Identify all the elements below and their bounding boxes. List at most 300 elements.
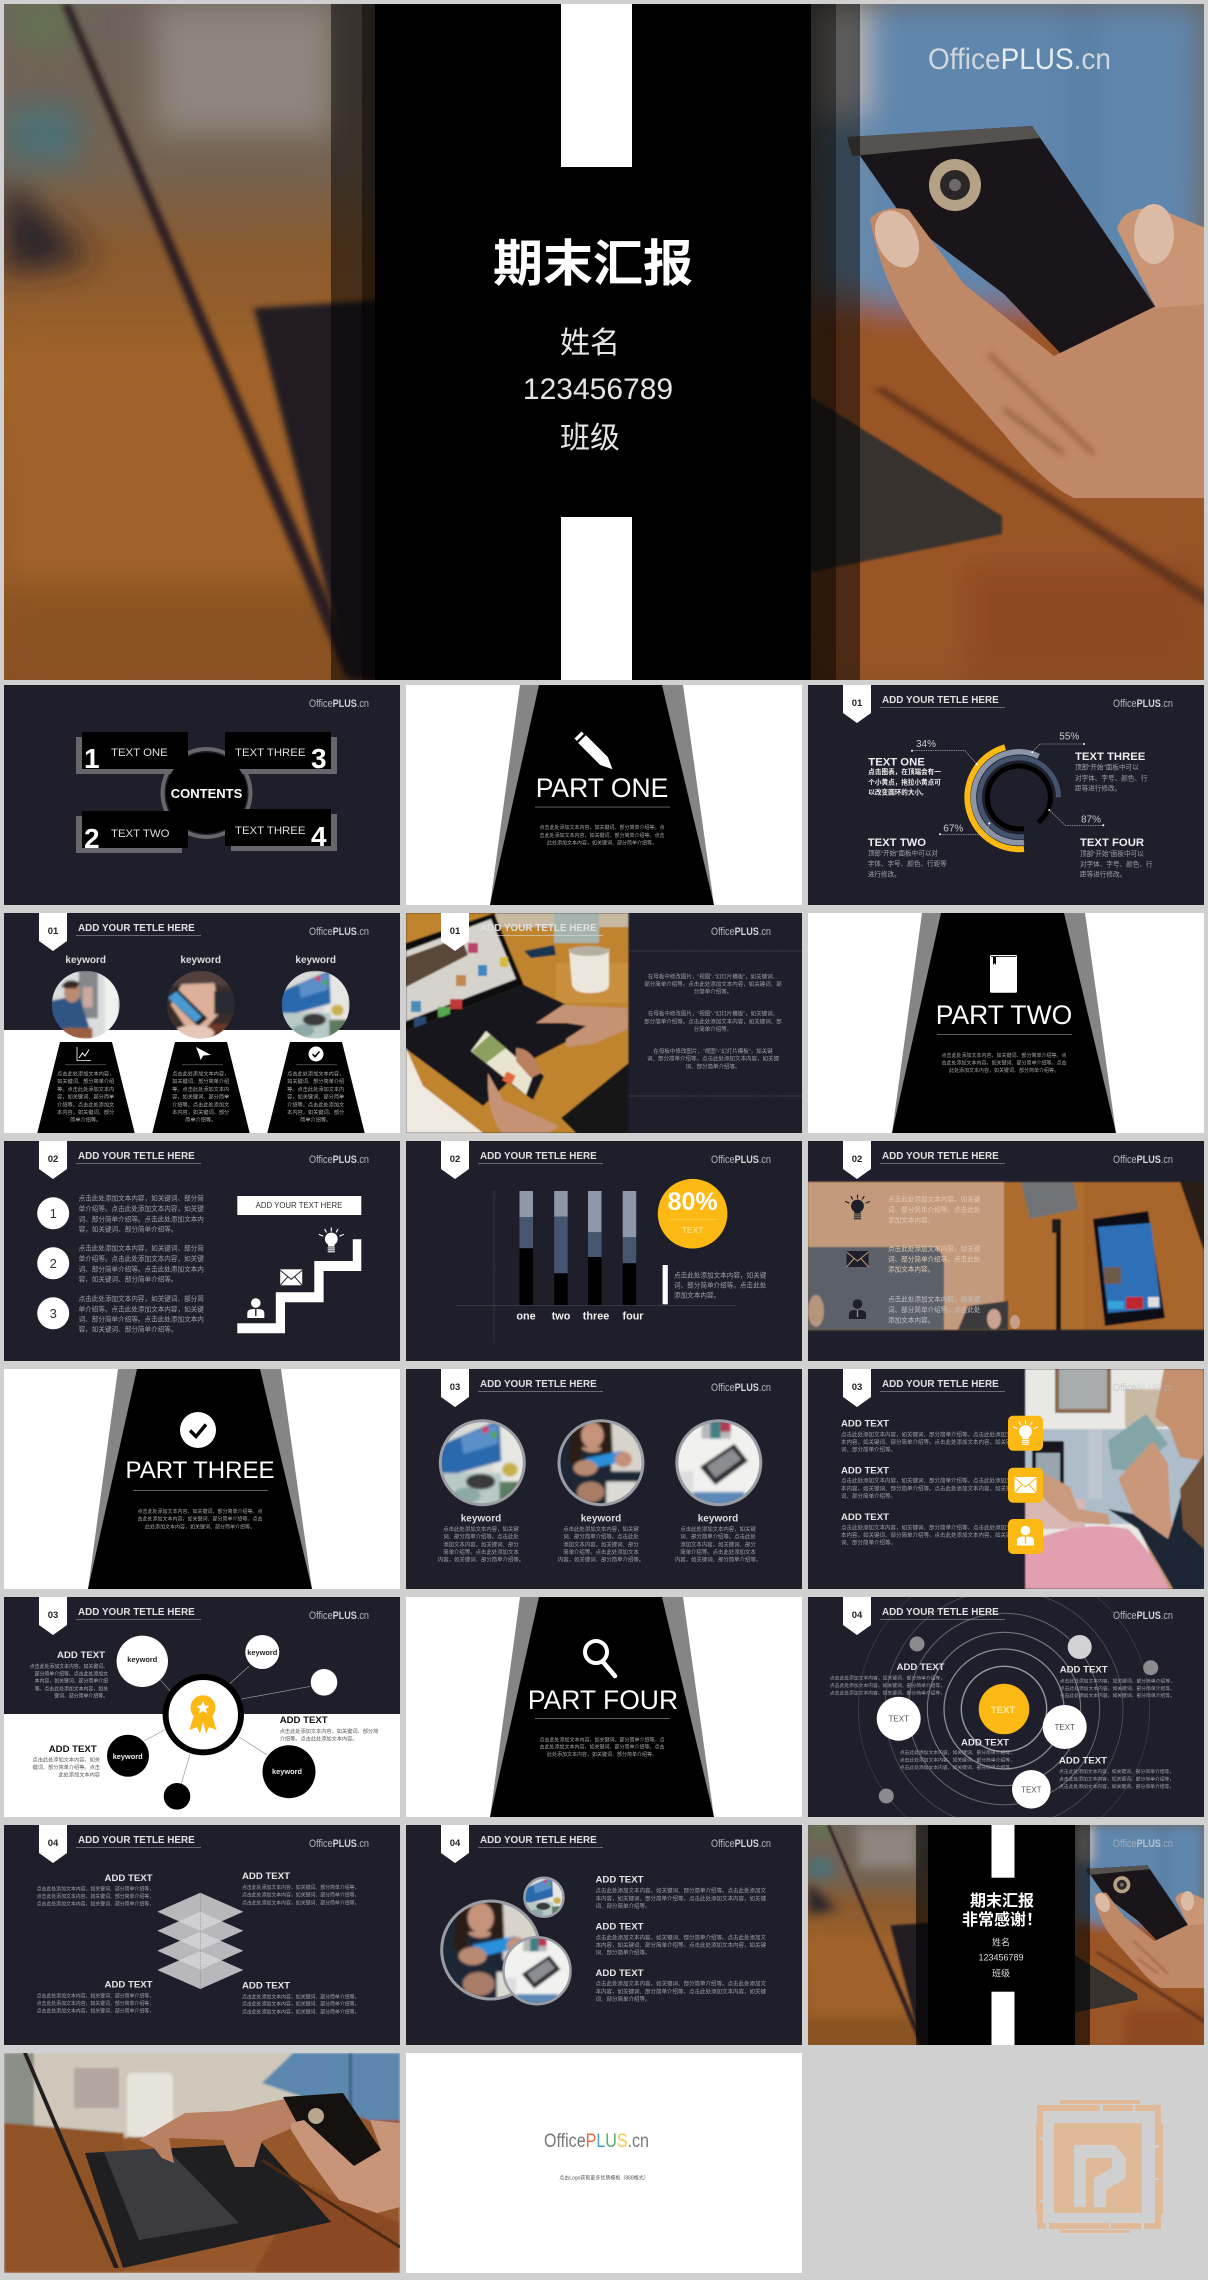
bubble: keyboard <box>502 1936 572 2005</box>
icon: light bulb <box>846 1195 870 1219</box>
item numbers: 4 <box>311 821 327 852</box>
bar labels: two <box>552 1310 571 1322</box>
text two: 字体、字号、颜色、行距等 <box>868 859 947 868</box>
item 2: 词、部分简单介绍等。 <box>596 1948 651 1956</box>
black trapezoids <box>37 1042 365 1133</box>
item labels: TEXT THREE <box>235 747 306 759</box>
bar three <box>588 1191 602 1305</box>
text block 2: 在母板中修改图片，“视图”-“幻灯片模板”，如关键词、 <box>648 1010 778 1018</box>
cover subtitle block <box>523 327 673 455</box>
section tab <box>39 913 67 951</box>
background <box>808 1597 1204 1817</box>
description: 击此处添加文本内容，如关键词、部分简单介绍等。点击 <box>539 1744 665 1751</box>
text bottom-left: 点击此处添加文本内容，如关键词、部分简单介绍等， <box>37 2008 154 2015</box>
white node small <box>311 1669 337 1696</box>
text bottom-right: ADD TEXT <box>242 1981 290 1992</box>
text block bottom-right: 点击此处添加文本内容，如关键词、部分简单介绍等， <box>1059 1783 1174 1790</box>
text block 3: 词、部分简单介绍等。点击此处 <box>888 1305 981 1314</box>
section number: 04 <box>450 1838 461 1849</box>
text block centre <box>900 1737 1015 1771</box>
yellow icon tile 1 <box>1008 1416 1043 1451</box>
item 3: 本内容，如关键词、部分简单介绍等。点击此处添加文本内容，如关键 <box>841 1531 1012 1539</box>
step 3 text: 词、部分简单介绍等。点击此处添加文本内 <box>79 1314 204 1323</box>
slide title: ADD YOUR TETLE HERE <box>480 1835 597 1846</box>
text block 2: 词、部分简单介绍等。点击此处 <box>888 1254 981 1263</box>
background <box>406 1597 802 1817</box>
text block 1: 添加文本内容。 <box>888 1215 934 1224</box>
step 1 text: 词、部分简单介绍等。点击此处添加文本内 <box>79 1214 204 1223</box>
text block top-right: 点击此处添加文本内容，如关键词、部分简单介绍等， <box>1060 1685 1175 1692</box>
white planets <box>877 1697 1087 1809</box>
column 1 text: 介绍等。点击此处添加文 <box>57 1100 115 1108</box>
section tab <box>843 685 871 723</box>
icon: check badge <box>308 1046 324 1062</box>
text four: 顶部“开始”面板中可以 <box>1080 849 1144 858</box>
top-left text: 本内容，如关键词、部分简单介绍 <box>35 1678 108 1685</box>
item 1: 词、部分简单介绍等。 <box>841 1446 896 1454</box>
phone <box>283 2093 381 2166</box>
background <box>406 685 802 905</box>
text bottom-right: 点击此处添加文本内容，如关键词、部分简单介绍等， <box>242 2008 359 2015</box>
title underline <box>880 1390 1005 1393</box>
text block 1: 分简单介绍等。 <box>694 988 732 996</box>
text block 3: 词、部分简单介绍等。点击此处添加文本内容，如关键 <box>647 1055 779 1063</box>
bar one <box>520 1191 533 1305</box>
section tab <box>39 1597 67 1635</box>
heading: PART ONE <box>536 773 668 803</box>
section number: 03 <box>450 1382 460 1393</box>
centre ring <box>162 749 250 837</box>
text block top-right <box>1060 1664 1175 1699</box>
step 3 text: 点击此处添加文本内容，如关键词、部分简 <box>79 1294 204 1303</box>
slide: woman photo with icons <box>808 1369 1204 1589</box>
section tab <box>441 1369 469 1407</box>
text block 3: 添加文本内容。 <box>888 1315 934 1324</box>
title underline <box>76 1846 201 1849</box>
slide title: ADD YOUR TETLE HERE <box>78 1607 195 1618</box>
keyword labels: keyword <box>461 1513 501 1524</box>
central ring <box>166 1677 241 1752</box>
leader lines <box>912 744 1103 834</box>
text four: 对字体、字号、颜色、行 <box>1080 859 1153 868</box>
column 3 text: 点击此处添加文本内容，如关键 <box>680 1525 756 1533</box>
slide: part three <box>4 1369 400 1589</box>
column 3 text: 内容，如关键词、部分简单介绍等。 <box>675 1556 761 1564</box>
stat value: 80% <box>668 1188 718 1216</box>
slide: contents <box>4 685 400 905</box>
gray trapezoid <box>490 1597 714 1817</box>
item 3: ADD TEXT <box>841 1512 889 1523</box>
icon: paper plane <box>196 1047 211 1060</box>
description: 点击此处添加文本内容，如关键词、部分简单介绍等。点 <box>539 824 665 831</box>
item numbers: 2 <box>84 823 100 854</box>
column 1 text: 如关键词、部分简单介绍 <box>57 1077 114 1085</box>
icon: magnifier <box>585 1641 615 1676</box>
item 2 <box>841 1465 1012 1500</box>
bar labels: three <box>583 1310 609 1322</box>
column 1 text: 容，如关键词、部分简单 <box>57 1093 114 1101</box>
item 1 <box>596 1875 767 1910</box>
item 1: 点击此处添加文本内容，如关键词、部分简单介绍等。点击此处添加文 <box>841 1430 1012 1438</box>
dark background <box>4 1597 400 1714</box>
step 1 text: 单介绍等。点击此处添加文本内容，如关键 <box>79 1204 204 1213</box>
lower-left text <box>33 1744 100 1779</box>
section number: 01 <box>852 698 863 709</box>
central yellow planet <box>979 1684 1029 1734</box>
cover subtitle block: 123456789 <box>523 373 673 406</box>
text two: 顶部“开始”面板中可以对 <box>868 849 938 858</box>
photo background <box>4 2053 400 2273</box>
photo circle: tablet desk <box>439 1420 525 1506</box>
gray dots <box>879 1635 1158 1804</box>
title underline <box>880 707 1005 708</box>
numbers: 2 <box>50 1256 57 1271</box>
background <box>406 913 802 1133</box>
keyword labels: keyword <box>581 1513 621 1524</box>
right text: ADD TEXT <box>280 1715 328 1726</box>
text block centre: 点击此处添加文本内容，如关键词、部分简单介绍等， <box>900 1764 1015 1771</box>
column 2 text: 词、部分简单介绍等。点击此处 <box>563 1533 639 1541</box>
column 3 text: 本内容，如关键词、部分 <box>287 1108 344 1116</box>
column 3 text: 简单介绍等。点击此处添加文本 <box>680 1548 756 1556</box>
description: 此处添加文本内容，如关键词、部分简单介绍等。 <box>949 1067 1059 1074</box>
bubble: tablet desk <box>524 1877 564 1918</box>
table inlay <box>262 2160 400 2247</box>
logo: OfficePLUS.cn <box>1113 1610 1173 1622</box>
item 1: 词、部分简单介绍等。 <box>596 1902 651 1910</box>
text top-right: ADD TEXT <box>242 1871 290 1882</box>
logo: OfficePLUS.cn <box>711 926 771 938</box>
text two <box>868 837 947 878</box>
item 3: 点击此处添加文本内容，如关键词、部分简单介绍等。点击此处添加文 <box>841 1523 1012 1531</box>
node labels: keyword <box>113 1752 143 1761</box>
title underline <box>478 934 603 937</box>
item numbers: 1 <box>84 743 100 774</box>
black node left <box>107 1735 149 1777</box>
white bottom background <box>4 1030 400 1133</box>
translucent band <box>916 1825 1090 2045</box>
step 2 text: 单介绍等。点击此处添加文本内容，如关键 <box>79 1254 204 1263</box>
text top-left: 点击此处添加文本内容，如关键词、部分简单介绍等， <box>37 1901 154 1908</box>
title underline <box>76 1162 201 1165</box>
title: 期末汇报 <box>970 1891 1034 1910</box>
lower-left text: ADD TEXT <box>49 1744 97 1755</box>
step 3 text: 容，如关键词、部分简单介绍等。 <box>79 1325 178 1334</box>
text bottom-left: 点击此处添加文本内容，如关键词、部分简单介绍等， <box>37 2000 154 2007</box>
slide title: ADD YOUR TETLE HERE <box>882 1151 999 1162</box>
text bottom-left: ADD TEXT <box>105 1980 153 1991</box>
description: 击此处添加文本内容，如关键词、部分简单介绍等。点击 <box>941 1060 1067 1067</box>
item labels: TEXT THREE <box>235 825 306 837</box>
item 2: ADD TEXT <box>596 1921 644 1932</box>
item 1: ADD TEXT <box>596 1875 644 1886</box>
colored logo: OfficePLUS.cn <box>544 2131 649 2152</box>
slide: photo bubbles <box>406 1825 802 2045</box>
numbers: 1 <box>50 1206 57 1221</box>
text top-left: ADD TEXT <box>105 1873 153 1884</box>
slide title: ADD YOUR TETLE HERE <box>882 1607 999 1618</box>
slide title: ADD YOUR TETLE HERE <box>480 923 597 934</box>
column 1 text: 简单介绍等。 <box>70 1116 101 1124</box>
logo: OfficePLUS.cn <box>309 698 369 710</box>
logo: OfficePLUS.cn <box>1113 1382 1173 1394</box>
column 2 text: 点击此处添加文本内容， <box>172 1070 229 1078</box>
divider <box>535 1717 670 1720</box>
text block 1: 在母板中修改图片，“视图”-“幻灯片模板”，如关键词、 <box>648 972 778 980</box>
slide: cover <box>4 4 1208 680</box>
step 2 text: 点击此处添加文本内容，如关键词、部分简 <box>79 1244 204 1253</box>
laptop <box>23 2053 331 2268</box>
icon: line chart <box>77 1047 91 1060</box>
column 1 text: 点击此处添加文本内容， <box>57 1070 114 1078</box>
slide: three photo circles <box>406 1369 802 1589</box>
text block 3: 词、部分简单介绍等。 <box>685 1062 741 1070</box>
text four <box>1080 837 1153 878</box>
section number: 02 <box>48 1154 58 1165</box>
text top-right: 点击此处添加文本内容，如关键词、部分简单介绍等， <box>242 1892 359 1899</box>
item 2 <box>596 1921 767 1956</box>
translucent inner band <box>362 4 836 680</box>
divider <box>535 806 670 808</box>
column 2 text: 本内容，如关键词、部分 <box>172 1108 229 1116</box>
column 2 text: 内容，如关键词、部分简单介绍等。 <box>558 1556 644 1564</box>
right text: 介绍等。点击此处添加文本内容。 <box>280 1735 358 1743</box>
label box <box>237 1196 361 1215</box>
black node right <box>262 1745 316 1798</box>
text block top-left: 点击此处添加文本内容，如关键词、部分简单介绍等， <box>830 1682 945 1689</box>
logo: OfficePLUS.cn <box>309 1838 369 1850</box>
background <box>808 1369 1204 1589</box>
text block top-right: 点击此处添加文本内容，如关键词、部分简单介绍等， <box>1060 1678 1175 1684</box>
column 1 text: 添加文本内容，如关键词、部分 <box>443 1540 519 1548</box>
text top-right: 点击此处添加文本内容，如关键词、部分简单介绍等， <box>242 1899 359 1906</box>
black trapezoid <box>490 685 714 905</box>
text three: 距等进行修改。 <box>1075 783 1121 792</box>
percentages: 55% <box>1059 731 1079 742</box>
percentages: 34% <box>916 739 936 750</box>
slide title: ADD YOUR TETLE HERE <box>882 1379 999 1390</box>
section tab <box>843 1597 871 1635</box>
item numbers: 3 <box>311 743 327 774</box>
text four: 距等进行修改。 <box>1080 869 1126 878</box>
text top-right: 点击此处添加文本内容，如关键词、部分简单介绍等， <box>242 1884 359 1891</box>
black column <box>928 1825 1075 2045</box>
top-left text: ADD TEXT <box>57 1650 105 1661</box>
text block 3: 点击此处添加文本内容，如关键 <box>888 1295 981 1304</box>
item 3 <box>596 1968 767 2003</box>
column 3 text: 简单介绍等。 <box>300 1116 331 1124</box>
text block 1: 部分简单介绍等。点击此处添加文本内容，如关键词、部 <box>644 980 782 988</box>
column 3 text: 词、部分简单介绍等。点击此处 <box>680 1533 756 1541</box>
description: 此处添加文本内容，如关键词、部分简单介绍等。 <box>547 840 657 846</box>
text block bottom-right: 点击此处添加文本内容，如关键词、部分简单介绍等， <box>1059 1768 1174 1775</box>
title underline <box>478 1846 603 1849</box>
logo: OfficePLUS.cn <box>1113 1838 1173 1850</box>
text two: TEXT TWO <box>868 837 926 849</box>
black node bottom <box>164 1783 190 1810</box>
text block 2: 部分简单介绍等。点击此处添加文本内容，如关键词、部 <box>644 1017 782 1025</box>
text block top-left <box>830 1662 945 1697</box>
column 3 text: 等。点击此处添加文本内 <box>287 1085 344 1093</box>
icon: person <box>1017 1526 1034 1546</box>
right text <box>280 1715 378 1743</box>
background <box>4 685 400 905</box>
label text: ADD YOUR TEXT HERE <box>256 1201 342 1210</box>
numbers <box>50 1206 57 1321</box>
icon: envelope <box>846 1251 868 1267</box>
caption: 点击Logo获取更多优质模板（888格式） <box>559 2174 649 2182</box>
background <box>808 1141 1204 1361</box>
white bar accent <box>663 1265 668 1304</box>
planet labels: TEXT <box>1021 1786 1042 1794</box>
title underline <box>478 1390 603 1393</box>
bar labels <box>516 1310 644 1322</box>
cover subtitle block: 班级 <box>560 422 620 455</box>
slide: part four <box>406 1597 802 1817</box>
slide: stacked diamonds <box>4 1825 400 2045</box>
divider <box>937 1033 1072 1036</box>
icon: book <box>990 955 1017 993</box>
side text: 点击此处添加文本内容，如关键 <box>674 1270 767 1279</box>
icon: envelope <box>280 1269 302 1285</box>
icon: award badge <box>190 1695 216 1734</box>
text one <box>868 756 941 796</box>
slide: keywords with trapezoids <box>4 913 400 1133</box>
slide: closing laptop photo <box>4 2053 400 2273</box>
column 1 text: 等。点击此处添加文本内 <box>57 1085 114 1093</box>
right hand <box>291 2120 400 2213</box>
yellow icon tile 3 <box>1008 1519 1043 1554</box>
text block 3: 在母板中修改图片，“视图”-“幻灯片模板”，如关键 <box>653 1047 773 1055</box>
text three: 顶部“开始”面板中可以 <box>1075 763 1139 772</box>
slide: thanks <box>808 1825 1205 2048</box>
item 1: 本内容，如关键词、部分简单介绍等。点击此处添加文本内容，如关键 <box>596 1894 767 1902</box>
logo: OfficePLUS.cn <box>1113 698 1173 710</box>
background <box>4 1141 400 1361</box>
title underline <box>880 1618 1005 1621</box>
step 2 text: 词、部分简单介绍等。点击此处添加文本内 <box>79 1264 204 1273</box>
column 2 text: 简单介绍等。点击此处添加文本 <box>563 1548 639 1556</box>
translucent outer band <box>331 4 860 680</box>
column 2 text: 简单介绍等。 <box>185 1116 216 1124</box>
top-left text: 点击此处添加文本内容，如关键词、 <box>30 1663 108 1670</box>
subtitle: 123456789 <box>978 1952 1024 1962</box>
logo: OfficePLUS.cn <box>711 1154 771 1166</box>
black label boxes <box>82 732 331 848</box>
white bottom bar <box>992 1992 1014 2045</box>
bubble: woman with phone <box>441 1898 541 2000</box>
slide: phone on wood <box>808 1141 1204 1361</box>
photo circle: man <box>52 971 120 1039</box>
central label: TEXT <box>991 1705 1015 1716</box>
text bottom-left: 点击此处添加文本内容，如关键词、部分简单介绍等， <box>37 1993 154 2000</box>
subtitle: 班级 <box>992 1968 1010 1978</box>
background <box>4 1825 400 2045</box>
section tab <box>441 1825 469 1863</box>
section number: 01 <box>450 926 461 937</box>
icon: light bulb <box>319 1228 343 1252</box>
text block bottom-right: ADD TEXT <box>1059 1756 1107 1767</box>
item 3: 点击此处添加文本内容，如关键词、部分简单介绍等。点击此处添加文 <box>596 1980 767 1988</box>
photo: keyboard under tint <box>808 1182 1008 1330</box>
slide: laptop photo with text <box>406 913 802 1133</box>
photo right edge fingertips <box>1010 1315 1020 1329</box>
section tab <box>39 1825 67 1863</box>
background <box>4 1369 400 1589</box>
text three <box>1075 751 1148 792</box>
gray trapezoid <box>88 1369 312 1589</box>
cover photo: laptop and hand holding phone <box>4 4 1208 680</box>
text block bottom-right: 点击此处添加文本内容，如关键词、部分简单介绍等， <box>1059 1776 1174 1782</box>
item 1 <box>841 1419 1012 1454</box>
cover photo repeat <box>808 1825 1205 2048</box>
heading: PART TWO <box>936 1000 1072 1030</box>
slide: orbit diagram <box>808 1563 1204 1855</box>
text block centre: ADD TEXT <box>961 1737 1009 1748</box>
centre disc <box>166 752 247 834</box>
section number: 02 <box>852 1154 862 1165</box>
logo: OfficePLUS.cn <box>309 1154 369 1166</box>
text block 1: 词、部分简单介绍等。点击此处 <box>888 1205 981 1214</box>
text one: 以改变圆环的大小。 <box>868 787 928 796</box>
text block 1: 点击此处添加文本内容，如关键 <box>888 1195 981 1204</box>
text block top-right: 点击此处添加文本内容，如关键词、部分简单介绍等， <box>1060 1692 1175 1699</box>
black trapezoid <box>892 913 1116 1133</box>
bar labels: four <box>622 1310 644 1322</box>
item labels <box>111 747 306 840</box>
text top-left: 点击此处添加文本内容，如关键词、部分简单介绍等， <box>37 1893 154 1900</box>
column 3 text: 容，如关键词、部分简单 <box>287 1093 344 1101</box>
background <box>808 685 1204 905</box>
background <box>406 1825 802 2045</box>
background <box>406 1141 802 1361</box>
concentric arc chart <box>967 747 1058 849</box>
slide: numbered steps <box>4 1141 400 1361</box>
black centre column <box>375 4 811 680</box>
gray trapezoid <box>892 913 1116 1133</box>
text one: 个小黄点，拖拉小黄点可 <box>868 777 941 786</box>
planet labels <box>888 1715 1075 1794</box>
slide title: ADD YOUR TETLE HERE <box>78 1835 195 1846</box>
leader dots <box>911 743 1104 835</box>
step 1 text: 容，如关键词、部分简单介绍等。 <box>79 1224 178 1233</box>
top-left text: 部分简单介绍等。点击此处添加文 <box>35 1670 108 1677</box>
column 1 text: 本内容，如关键词、部分 <box>57 1108 114 1116</box>
text block top-left: 点击此处添加文本内容，如关键词、部分简单介绍等， <box>830 1674 945 1682</box>
slide title: ADD YOUR TETLE HERE <box>78 923 195 934</box>
percentages <box>916 731 1101 835</box>
logo: OfficePLUS.cn <box>309 1610 369 1622</box>
logo: OfficePLUS.cn <box>711 1382 771 1394</box>
planet labels: TEXT <box>888 1715 909 1724</box>
item 3: 本内容，如关键词、部分简单介绍等。点击此处添加文本内容，如关键 <box>596 1987 767 1995</box>
keyword labels: keyword <box>65 955 106 966</box>
item 3 <box>841 1512 1012 1547</box>
step 3 text: 单介绍等。点击此处添加文本内容，如关键 <box>79 1304 204 1313</box>
laptop photo <box>406 913 628 1133</box>
column 2 text: 容，如关键词、部分简单 <box>172 1093 229 1101</box>
axes <box>457 1191 736 1343</box>
black trapezoid <box>88 1369 312 1589</box>
description: 击此处添加文本内容，如关键词、部分简单介绍等。点击 <box>137 1516 263 1523</box>
background <box>406 2053 802 2273</box>
white background <box>4 1714 400 1817</box>
slide: ring chart <box>808 685 1204 905</box>
item 3: 词、部分简单介绍等。 <box>596 1995 651 2003</box>
slide: stacked bar chart <box>406 1141 802 1361</box>
description: 此处添加文本内容，如关键词、部分简单介绍等。 <box>145 1523 255 1530</box>
dark top background <box>4 913 400 1030</box>
